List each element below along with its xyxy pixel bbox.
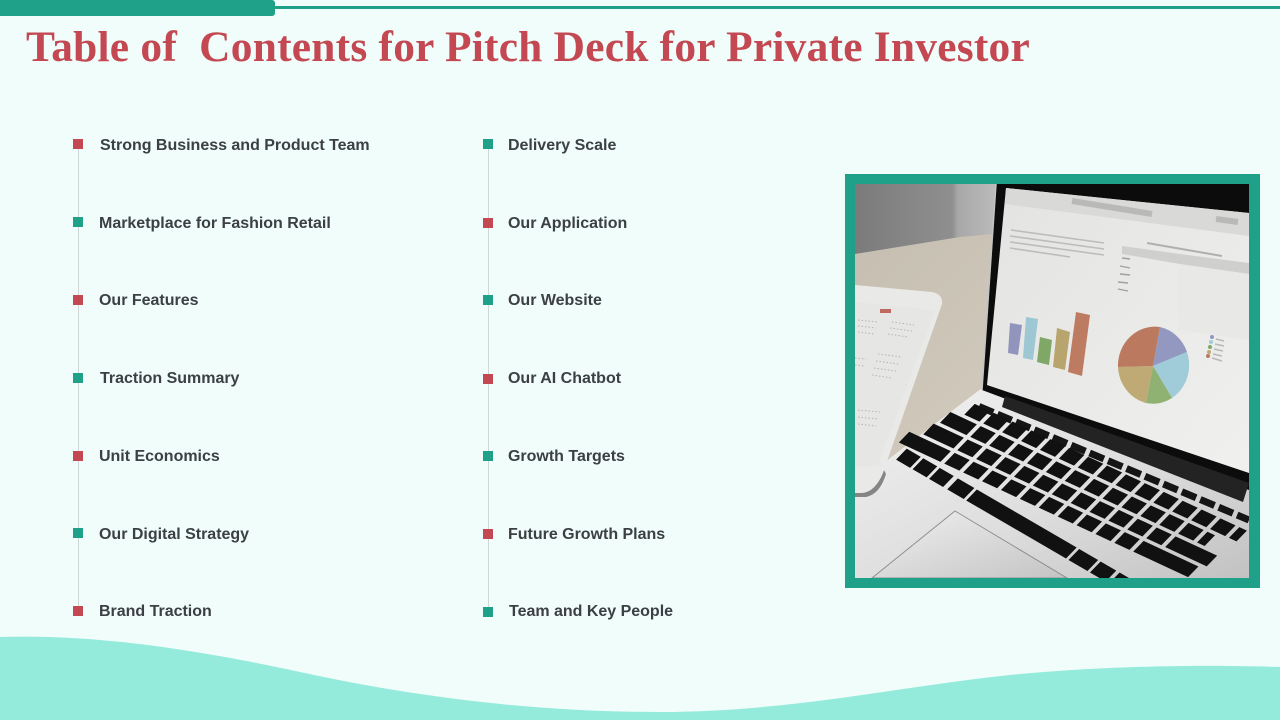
tablet — [855, 285, 942, 497]
item: Our Application: Our Application — [508, 215, 627, 232]
photo frame: laptop with charts — [845, 174, 1260, 588]
item: Delivery Scale: Delivery Scale — [508, 137, 616, 154]
toolbar — [1005, 188, 1249, 236]
item: Team and Key People: Team and Key People — [509, 603, 673, 620]
item: Marketplace for Fashion Retail: Marketplace for Fashion Retail — [99, 215, 331, 232]
item: Brand Traction: Brand Traction — [99, 603, 212, 620]
panel: left contents column — [73, 137, 370, 620]
item: Strong Business and Product Team: Strong Business and Product Team — [100, 137, 370, 154]
laptop body — [855, 388, 1249, 578]
item: Growth Targets: Growth Targets — [508, 448, 625, 465]
item: Our Features: Our Features — [99, 292, 198, 309]
trackpad — [872, 511, 1067, 578]
table — [1118, 242, 1249, 292]
hinge — [1002, 396, 1249, 502]
item: Unit Economics: Unit Economics — [99, 448, 220, 465]
item: Our AI Chatbot: Our AI Chatbot — [508, 370, 621, 387]
bar chart — [1008, 312, 1090, 376]
item: Our Digital Strategy: Our Digital Strategy — [99, 526, 249, 543]
keyboard — [896, 403, 1249, 578]
wall — [855, 184, 998, 254]
title: Table of Contents for Pitch Deck for Private Investor — [26, 23, 1030, 71]
screen text lines — [1010, 230, 1104, 257]
pie legend — [1206, 335, 1224, 361]
wave footer — [0, 636, 1280, 720]
top accent bar — [0, 0, 1280, 16]
pie chart — [1118, 327, 1189, 404]
screen — [987, 188, 1249, 473]
item: Future Growth Plans: Future Growth Plans — [508, 526, 665, 543]
laptop lid — [982, 184, 1249, 490]
item: Our Website: Our Website — [508, 292, 602, 309]
item: Traction Summary: Traction Summary — [100, 370, 239, 387]
panel: right contents column — [483, 137, 673, 620]
